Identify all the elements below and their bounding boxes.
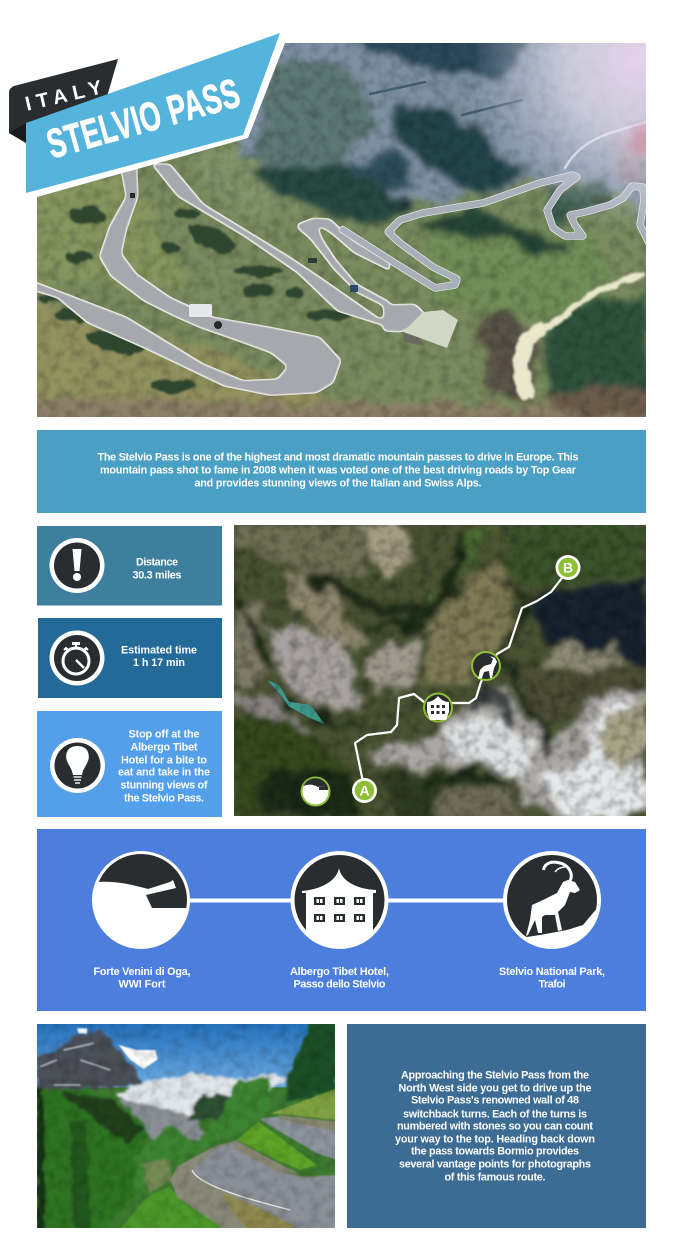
panel: tip: eat and take in the: [118, 766, 210, 778]
icon: hotel: [290, 851, 388, 950]
hero vehicles: [130, 193, 358, 329]
marker A: A: [359, 782, 370, 798]
panel: tip: Stop off at the: [128, 728, 200, 740]
hero river: [520, 276, 642, 392]
map ridges: [234, 542, 554, 788]
panel: route description: several vantage points for photographs: [399, 1158, 591, 1170]
title banner: [9, 33, 285, 197]
panel: points of interest: Albergo Tibet Hotel,: [290, 966, 389, 978]
icon: light bulb: [50, 738, 105, 793]
panel: distance: [37, 526, 222, 606]
map: [234, 525, 647, 818]
map route: [355, 578, 562, 782]
panel: route description: switchback turns. Each of the turns is: [403, 1108, 587, 1120]
hero photo: mountain road: [30, 30, 660, 425]
map terrain: [234, 525, 647, 818]
description panel: The Stelvio Pass is one of the highest and most dramatic mountain passes to drive in Europe. This: [98, 452, 578, 464]
marker A: [352, 778, 377, 803]
hero bushes: [39, 195, 612, 393]
panel: tip: [37, 711, 222, 817]
panel: points of interest: Trafoi: [538, 978, 566, 990]
icon: fort: [90, 850, 195, 949]
description panel: [37, 430, 646, 513]
icon: exclamation: [50, 538, 104, 593]
panel: route description: North West side you get to drive up the: [398, 1082, 592, 1094]
connector line: [141, 898, 552, 902]
description panel: and provides stunning views of the Italian and Swiss Alps.: [194, 478, 482, 490]
marker B: B: [563, 560, 573, 576]
panel: tip: stunning views of: [120, 780, 208, 792]
marker fort: [300, 776, 330, 806]
icon: stopwatch: [50, 630, 104, 686]
panel: estimated time: [38, 618, 222, 698]
description panel: mountain pass shot to fame in 2008 when it was voted one of the best driving roads by Top Gear: [100, 464, 577, 476]
map lake: [267, 680, 325, 724]
panel: route description: numbered with stones so you can count: [397, 1120, 593, 1132]
italy ribbon: [9, 59, 118, 143]
panel: route description: of this famous route.: [444, 1172, 546, 1184]
italy ribbon: ITALY: [23, 77, 105, 116]
panel: points of interest: Forte Venini di Oga,: [94, 966, 190, 978]
marker ibex: [471, 651, 501, 681]
marker B: [556, 555, 580, 580]
panel: points of interest: [37, 829, 646, 1011]
panel: tip: Albergo Tibet: [130, 742, 198, 754]
panel: tip: Hotel for a bite to: [121, 754, 207, 766]
panel: route description: [347, 1024, 646, 1228]
title banner: STELVIO PASS: [42, 71, 245, 168]
panel: estimated time: 1 h 17 min: [133, 657, 185, 669]
panel: points of interest: Stelvio National Park,: [499, 966, 605, 978]
panel: distance: 30.3 miles: [132, 570, 182, 582]
panel: distance: Distance: [136, 556, 178, 568]
icon: ibex: [503, 851, 601, 950]
panel: points of interest: Passo dello Stelvio: [294, 978, 386, 990]
hero roadside building: [403, 310, 458, 348]
panel: tip: the Stelvio Pass.: [124, 792, 204, 804]
marker hotel: [423, 692, 453, 722]
panel: points of interest: WWI Fort: [118, 978, 166, 990]
panel: route description: the pass towards Bormio provides: [411, 1146, 579, 1158]
panel: estimated time: Estimated time: [121, 644, 197, 656]
panel: route description: your way to the top. Heading back down: [395, 1134, 595, 1146]
hero roads: [32, 160, 420, 396]
photo: alpine road: [37, 1020, 337, 1233]
panel: route description: Approaching the Stelvio Pass from the: [401, 1070, 589, 1082]
panel: route description: Stelvio Pass's renowned wall of 48: [411, 1094, 579, 1106]
